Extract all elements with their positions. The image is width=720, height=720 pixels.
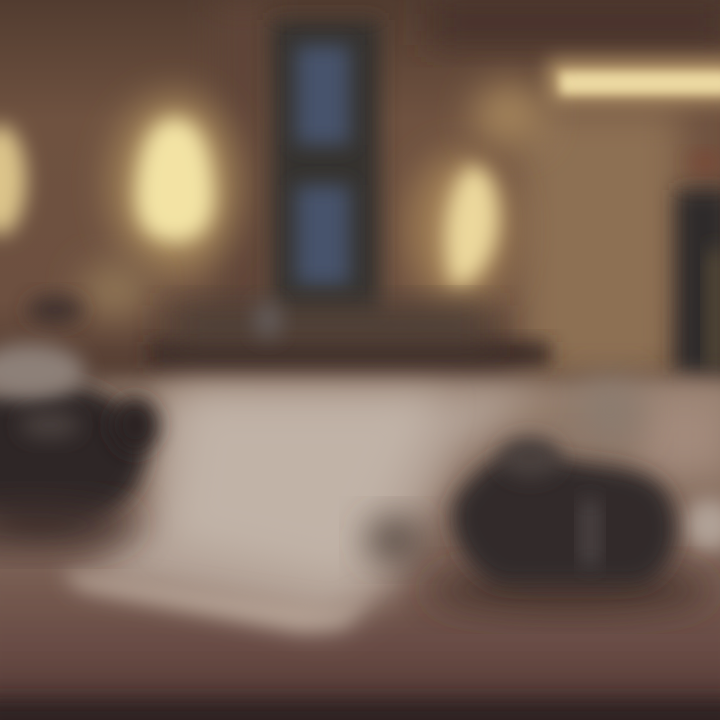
front desk edge shadow	[0, 700, 720, 720]
left wall lamp	[110, 95, 240, 275]
right desk highlight	[640, 395, 720, 551]
right door frame	[676, 153, 720, 375]
window	[272, 20, 380, 315]
shelf with objects	[27, 262, 550, 368]
left dark object	[0, 344, 159, 547]
ceiling light strip	[472, 60, 720, 147]
wall background	[0, 0, 720, 400]
right cluster of dark objects	[367, 378, 710, 612]
far-left lamp	[0, 125, 26, 235]
desk surface	[0, 380, 720, 720]
paper sheets on desk	[60, 390, 540, 630]
right wall lamp	[408, 152, 512, 308]
